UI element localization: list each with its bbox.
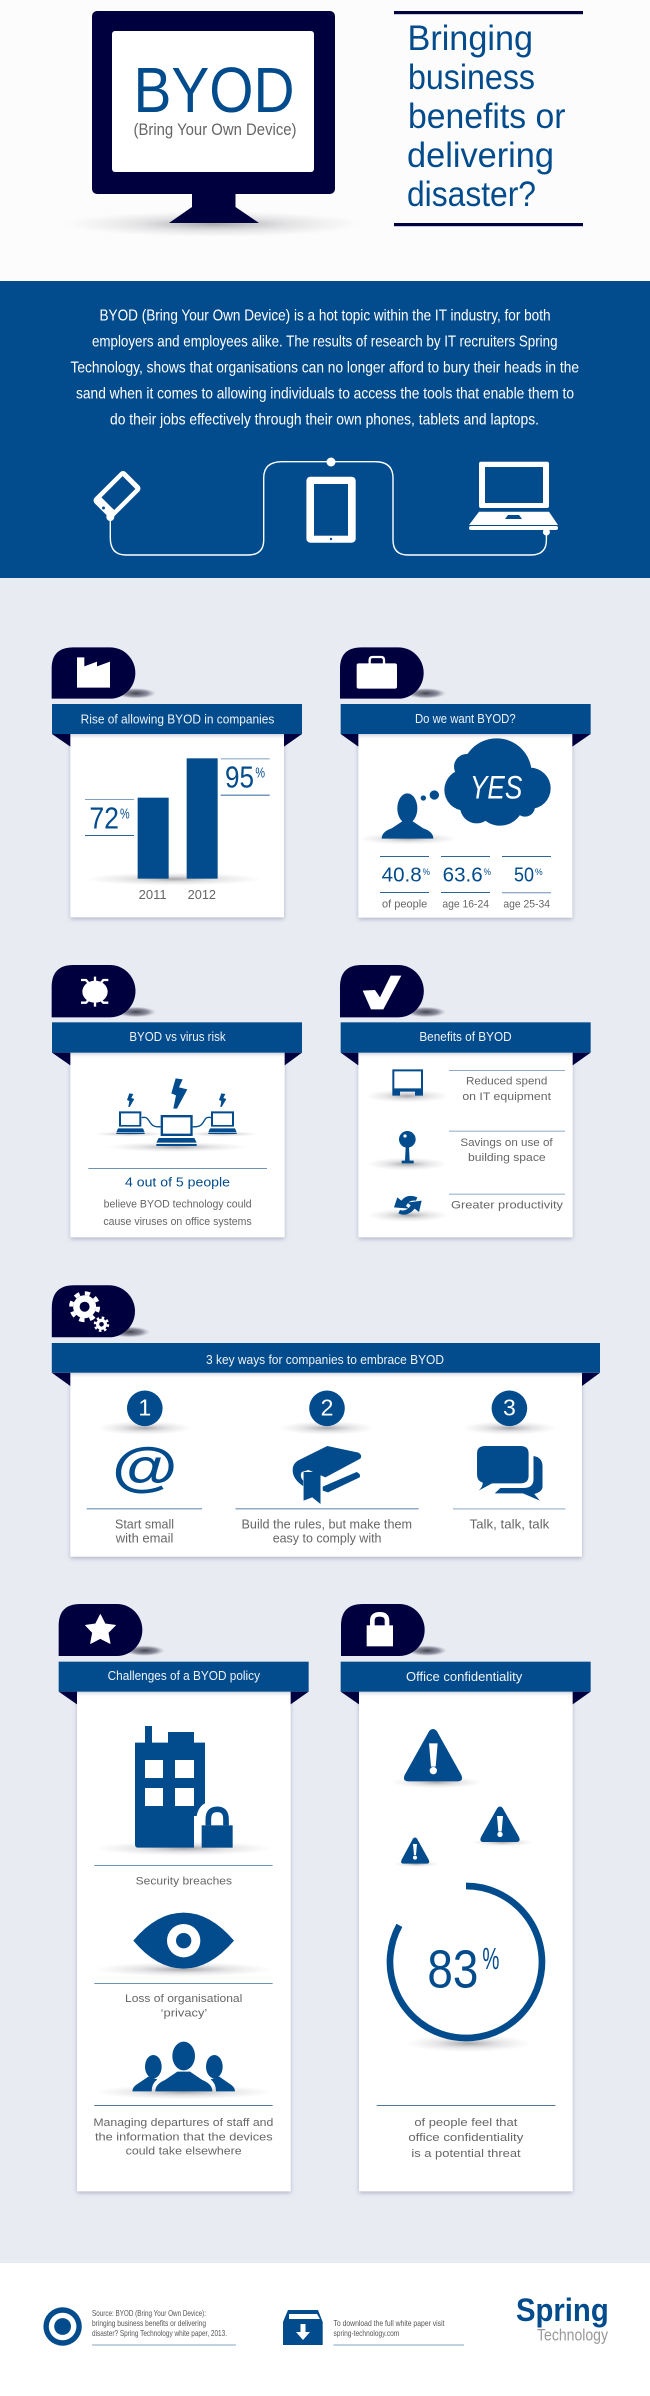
icon: book: [293, 1446, 361, 1504]
benefit: reduced spend: on IT equipment: [462, 1091, 551, 1103]
source text: bringing business benefits or delivering: [92, 2318, 206, 2328]
panel: benefits of BYOD: [340, 965, 591, 1237]
intro paragraph: sand when it comes to allowing individuals to access the tools that enable them to: [76, 386, 574, 402]
download text: [334, 2318, 464, 2346]
way 3: talk talk talk: Talk, talk, talk: [470, 1516, 550, 1531]
connecting cable: [110, 462, 546, 555]
stat: 95 percent: [221, 758, 270, 796]
cable node: [326, 458, 336, 466]
stat text: 4 out of 5 people: cause viruses on office systems: [103, 1216, 252, 1228]
stat: 95 percent: 95: [225, 761, 254, 795]
panel: rise of allowing BYOD: [52, 647, 302, 917]
caption: office confidentiality threat: office confidentiality: [408, 2132, 524, 2144]
panel: do we want BYOD: [340, 647, 591, 918]
intro paragraph: Technology, shows that organisations can no longer afford to bury their heads in the: [70, 360, 579, 376]
icon: padlock: [367, 1614, 393, 1646]
stat: 40.8 percent of people: [380, 856, 430, 911]
monitor stand: [169, 190, 259, 223]
thought cloud with YES: [444, 738, 551, 826]
icon: bug: [81, 977, 108, 1007]
ribbon folds: [341, 734, 591, 747]
ribbon heading: Do we want BYOD?: [415, 712, 516, 726]
icon: large warning triangle: [390, 1729, 483, 1788]
benefit: savings on building space: building space: [468, 1152, 546, 1164]
tab: [52, 1285, 135, 1337]
icon: star: [86, 1615, 115, 1643]
icon: office building with padlock: [94, 1726, 274, 1856]
way 1: start small with email: @: [112, 1437, 178, 1497]
logo: Spring Technology: Technology: [537, 2326, 608, 2345]
card: [359, 1692, 573, 2191]
title: Bringing business benefits or delivering disaster?: benefits or: [408, 97, 566, 136]
card: [358, 734, 572, 918]
tab: [52, 647, 135, 699]
way 3: talk talk talk: 3: [503, 1394, 516, 1420]
stat text: 4 out of 5 people: [88, 1168, 267, 1228]
panel: BYOD vs virus risk: [52, 965, 302, 1237]
bar chart: 2012: [188, 888, 216, 902]
caption: loss of privacy: Loss of organisational: [125, 1993, 242, 2005]
stat: 63.6 percent age 16-24: [441, 856, 491, 911]
intro paragraph: do their jobs effectively through their own phones, tablets and laptops.: [110, 412, 539, 428]
caption: managing departures: Managing departures of staff and: [93, 2117, 273, 2129]
stat: 63.6 percent age 16-24: %: [484, 867, 491, 877]
ribbon heading: [341, 1662, 591, 1692]
icon: factory: [77, 657, 110, 688]
title: Bringing business benefits or delivering disaster?: [394, 11, 583, 226]
ribbon heading: Office confidentiality: [406, 1670, 523, 1684]
card: [77, 1692, 291, 2191]
download text: To download the full white paper visit: [334, 2318, 445, 2328]
stat: 72 percent: [85, 799, 134, 836]
benefit: savings on building space: [449, 1131, 565, 1164]
icon: map pin: [367, 1131, 448, 1171]
donut chart: 83 percent: [390, 1886, 542, 2052]
stat: 40.8 percent of people: 40.8: [382, 865, 422, 887]
ribbon heading: Benefits of BYOD: [419, 1030, 512, 1044]
header: monitor with BYOD: [64, 11, 364, 237]
stat: 72 percent: 72: [89, 801, 119, 835]
way 1: start small with email: with email: [115, 1530, 174, 1545]
thought cloud with YES: YES: [470, 769, 522, 805]
panel: 3 key ways to embrace BYOD: [52, 1285, 600, 1557]
stat: 63.6 percent age 16-24: age 16-24: [442, 899, 489, 911]
panel: challenges of a BYOD policy: [59, 1604, 309, 2191]
ribbon folds: [52, 1053, 302, 1065]
panel: intro band: [0, 281, 650, 578]
monitor frame: [92, 11, 335, 194]
icon: tablet: [306, 477, 356, 543]
tab: [340, 647, 424, 699]
caption: office confidentiality threat: of people feel that: [414, 2117, 517, 2129]
footer: download note: [283, 2310, 464, 2346]
icon: monitor: [365, 1069, 450, 1103]
ribbon heading: [52, 1022, 302, 1053]
way 2: build the rules: 2: [321, 1394, 333, 1420]
title: Bringing business benefits or delivering disaster?: business: [408, 58, 535, 97]
card: [70, 1053, 285, 1237]
stat text: 4 out of 5 people: 4 out of 5 people: [125, 1176, 230, 1190]
caption: managing departures: [93, 2105, 273, 2158]
card: [70, 1373, 582, 1557]
benefit: greater productivity: [449, 1194, 565, 1212]
ribbon folds: [52, 734, 302, 747]
caption: loss of privacy: ‘privacy’: [161, 2008, 207, 2020]
logo: Spring Technology: [516, 2292, 609, 2345]
way 2: build the rules: easy to comply with: [273, 1530, 382, 1545]
intro paragraph: BYOD (Bring Your Own Device) is a hot topic within the IT industry, for both: [100, 308, 550, 324]
icon: infected laptops: [93, 1078, 259, 1152]
ribbon heading: Challenges of a BYOD policy: [108, 1669, 261, 1683]
caption: managing departures: could take elsewhere: [126, 2146, 242, 2158]
ribbon folds: [52, 1373, 600, 1386]
icon: sync arrows: [368, 1196, 449, 1222]
ribbon heading: [59, 1662, 309, 1692]
intro paragraph: employers and employees alike. The results of research by IT recruiters Spring: [92, 334, 558, 350]
stat: 50 percent age 25-34: [502, 856, 551, 911]
benefit: greater productivity: Greater productivity: [451, 1200, 564, 1212]
monitor screen: [112, 31, 314, 172]
ribbon heading: 3 key ways for companies to embrace BYOD: [206, 1353, 444, 1367]
icon: checkmark: [363, 976, 401, 1009]
stat text: 4 out of 5 people: believe BYOD technology could: [104, 1199, 252, 1211]
icon: speech bubbles: [477, 1446, 543, 1501]
bar chart: 2011: [139, 888, 167, 902]
stat: 50 percent age 25-34: %: [535, 867, 543, 877]
title: Bringing business benefits or delivering disaster?: disaster?: [407, 175, 536, 214]
caption: managing departures: the information that the devices: [95, 2132, 273, 2144]
way 2: build the rules: [236, 1390, 419, 1545]
stat: 63.6 percent age 16-24: 63.6: [443, 865, 483, 887]
icon: small warning triangle: [394, 1837, 439, 1867]
source text: Source: BYOD (Bring Your Own Device):: [92, 2308, 206, 2318]
source text: disaster? Spring Technology white paper, 2013.: [92, 2328, 227, 2338]
stat: 50 percent age 25-34: 50: [514, 865, 534, 887]
panel: office confidentiality: [341, 1604, 591, 2191]
ribbon heading: [52, 704, 302, 734]
logo: Spring Technology: Spring: [516, 2292, 609, 2328]
title: Bringing business benefits or delivering disaster?: delivering: [407, 136, 554, 175]
card: [358, 1053, 573, 1237]
caption: office confidentiality threat: is a potential threat: [411, 2148, 521, 2160]
icon: laptop: [469, 462, 558, 536]
ribbon heading: [341, 704, 591, 734]
way 1: start small with email: 1: [138, 1394, 151, 1420]
way 1: start small with email: Start small: [115, 1516, 174, 1531]
tab: [341, 1604, 425, 1656]
icon: phone: [92, 469, 142, 521]
ribbon heading: [341, 1022, 591, 1053]
card: [70, 734, 284, 917]
tab: [340, 965, 424, 1017]
icon: download box: [283, 2310, 323, 2345]
way 3: talk talk talk: [453, 1390, 566, 1531]
icon: group of people: [94, 2042, 274, 2099]
caption: office confidentiality threat: [377, 2105, 555, 2160]
stat: 72 percent: %: [120, 806, 130, 822]
download text: spring-technology.com: [334, 2328, 399, 2338]
way 2: build the rules: Build the rules, but make them: [242, 1516, 412, 1531]
stat: 50 percent age 25-34: age 25-34: [503, 899, 550, 911]
stat: 40.8 percent of people: of people: [382, 899, 427, 911]
donut chart: 83 percent: 83: [427, 1940, 478, 1999]
ribbon heading: [52, 1343, 600, 1373]
BYOD logotype: BYOD: [134, 54, 294, 126]
icon: gears: [71, 1293, 108, 1331]
tab: [52, 965, 135, 1017]
title: Bringing business benefits or delivering disaster?: Bringing: [408, 19, 533, 58]
way 1: start small with email: [87, 1390, 202, 1545]
icon: eye: [94, 1913, 274, 1977]
bar chart: [83, 758, 263, 902]
stat: 95 percent: %: [255, 766, 265, 782]
icon: target: [43, 2307, 82, 2346]
source text: [92, 2308, 236, 2346]
ribbon folds: [341, 1053, 591, 1065]
tab: [59, 1604, 142, 1656]
caption: loss of privacy: [94, 1983, 273, 2020]
benefit: savings on building space: Savings on use of: [460, 1137, 554, 1149]
ribbon heading: BYOD vs virus risk: [129, 1030, 226, 1044]
footer: source note: [43, 2307, 236, 2346]
ribbon folds: [59, 1692, 309, 1704]
icon: person thinking: [358, 790, 458, 845]
BYOD subtitle: (Bring Your Own Device): [134, 120, 296, 139]
icon: briefcase: [357, 657, 397, 689]
benefit: reduced spend: [449, 1070, 565, 1103]
intro paragraph: [70, 308, 579, 428]
stat: 40.8 percent of people: %: [423, 867, 430, 877]
icon: medium warning triangle: [472, 1806, 533, 1846]
ribbon heading: Rise of allowing BYOD in companies: [81, 712, 274, 726]
benefit: reduced spend: Reduced spend: [466, 1076, 547, 1088]
caption: security breaches: Security breaches: [136, 1876, 233, 1888]
ribbon folds: [341, 1692, 591, 1704]
donut chart: 83 percent: %: [482, 1942, 499, 1976]
